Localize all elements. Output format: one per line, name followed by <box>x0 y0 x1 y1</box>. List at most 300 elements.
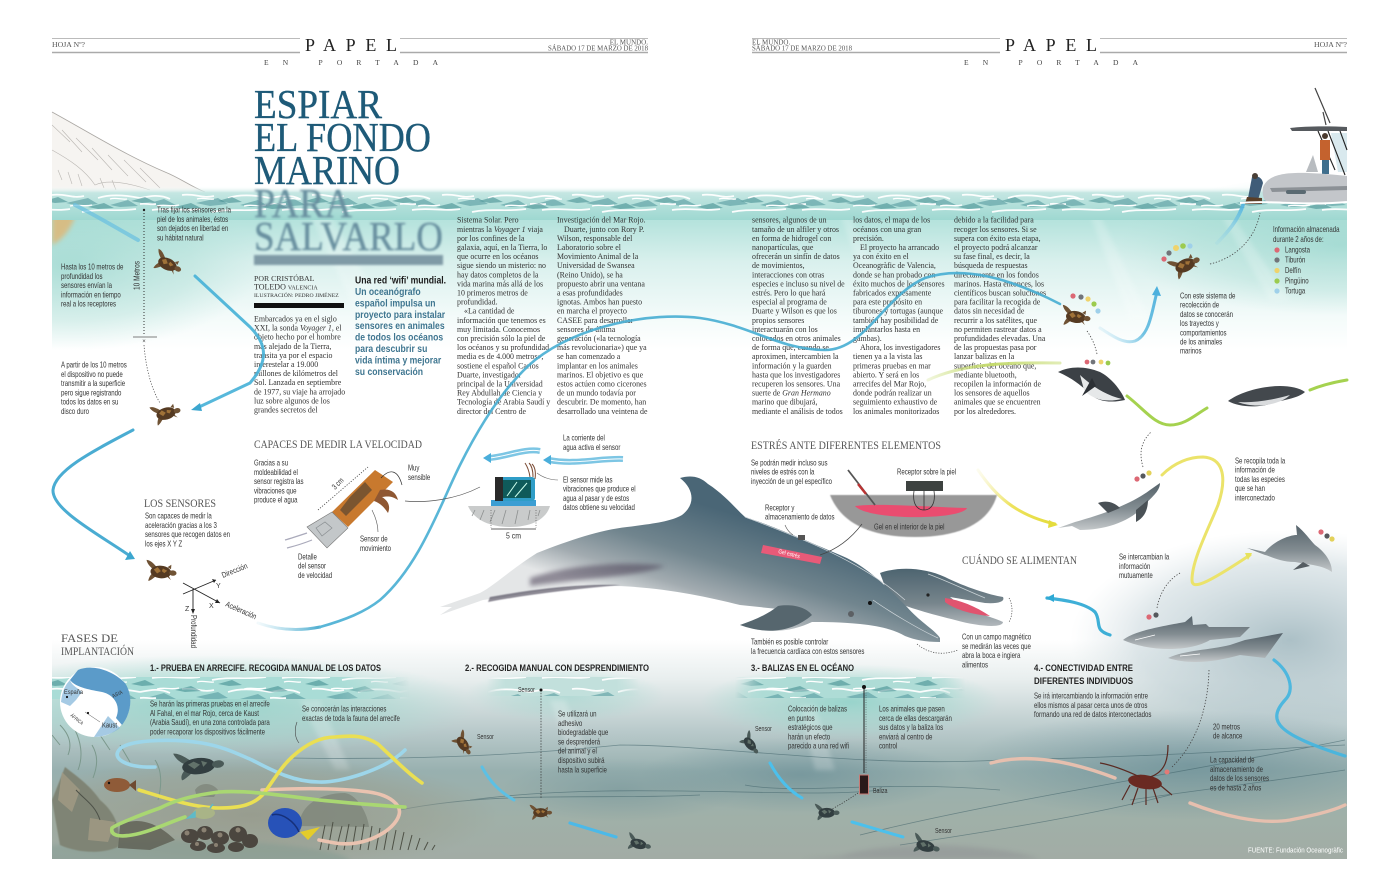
article column 2: Rey Abdullah de Ciencia y <box>457 389 542 398</box>
callout: beyond 10 metres: A partir de los 10 metros <box>61 361 127 370</box>
phase 2 diagram: Sensor <box>518 686 535 694</box>
article column 6: datos sin necesidad de <box>954 307 1025 316</box>
label: receptor almacenamiento: Receptor y <box>765 504 795 513</box>
article column 1: grandes secretos del <box>254 406 318 414</box>
article column 2: Tecnología de Arabia Saudí y <box>457 398 550 407</box>
article column 3: desarrollado una veintena de <box>557 407 648 416</box>
article column 1: millones de kilómetros del <box>254 369 339 378</box>
article column 2: por los confines de la <box>457 234 525 243</box>
phase 3 sensor labels: Sensor <box>935 827 952 835</box>
byline: POR CRISTÓBAL <box>254 273 315 283</box>
callout: up to 10 metres: sensores envían la <box>61 281 112 290</box>
axes diagram: Profundidad <box>189 615 198 648</box>
skin cross-section diagram <box>785 468 997 555</box>
waves over hull <box>1240 202 1347 203</box>
header: left page: PAPEL <box>305 35 397 55</box>
phase 2 wave band <box>487 677 639 696</box>
article column 6: animales que se encuentren <box>954 398 1041 407</box>
intro callout: su conservación <box>355 366 423 378</box>
label: detalle sensor: de velocidad <box>298 571 332 580</box>
header: left page <box>52 35 648 67</box>
trajectory: yellow route <box>978 457 1250 585</box>
callout: recoleccion: recolección de <box>1180 301 1219 310</box>
phase 1 text: first tests: Al Fahal, en el mar Rojo, cerca de Kaust <box>150 709 259 718</box>
article column 6: directamente en los fondos <box>954 270 1039 279</box>
article column 3: más revolucionaria») que ya <box>557 343 647 352</box>
section: los sensores: sensores que recogen datos en <box>145 530 230 539</box>
article column 3: de un mundo todavía por <box>557 389 636 398</box>
article column 3: implantar en los animales <box>557 361 638 370</box>
callout: corriente: La corriente del <box>563 434 605 443</box>
article column 4: hasta que los investigadores <box>752 370 840 379</box>
article column 5: Ahora, los investigadores <box>860 343 940 352</box>
phase 2 heading: 2.- RECOGIDA MANUAL CON DESPRENDIMIENTO <box>465 663 649 673</box>
article column 1: Embarcados ya en el siglo <box>254 314 337 324</box>
intro callout: para descubrir su <box>355 343 428 355</box>
trajectory: blue route <box>53 205 1345 756</box>
title: blurred submerged part: PARA <box>254 180 352 226</box>
article column 4: colocados en otros animales <box>752 334 841 343</box>
section: los sensores <box>144 498 230 549</box>
article column 3: se han comenzado a <box>557 352 621 361</box>
article column 5: gambas). <box>853 334 882 343</box>
heading: fases de implantacion <box>61 633 135 658</box>
callout: recoleccion: Con este sistema de <box>1180 292 1235 301</box>
article column 2: hay datos completos de la <box>457 270 539 279</box>
article column 2: mientras la Voyager 1 viaja <box>457 225 543 234</box>
callout: recopila: información de <box>1235 466 1275 475</box>
article column 3: Investigación del Mar Rojo. <box>557 216 646 225</box>
phase 2 text: dispositivo subirá <box>558 756 605 765</box>
skin cross-section diagram: Receptor sobre la piel <box>897 468 956 477</box>
article column 4: mediante el análisis de todos <box>752 407 843 416</box>
callout: beyond 10 metres: el dispositivo no puede <box>61 370 123 379</box>
callout: recoleccion: marinos <box>1180 347 1202 356</box>
intro callout: sensores en animales <box>355 320 445 332</box>
phase 1 wave band <box>52 677 410 699</box>
title: blurred submerged part: SALVARLO <box>254 213 443 259</box>
article column 3: Universidad de Swansea <box>557 261 635 270</box>
title: ESPIAR <box>254 81 383 127</box>
callout: sensor mide: datos obtiene su velocidad <box>563 503 635 512</box>
callout: storage: La capacidad de <box>1210 756 1255 765</box>
depth scale: 10 metres <box>132 209 160 403</box>
source credit: FUENTE: Fundación Oceanogràfic <box>1248 848 1343 854</box>
article column 5: para este propósito en <box>853 298 922 307</box>
water current arrows <box>483 450 623 465</box>
intro callout: proyecto para instalar <box>355 309 445 321</box>
callout: up to 10 metres: profundidad los <box>61 272 103 281</box>
icon: phase 3 turtle 1 <box>737 730 764 758</box>
article column 4: recuperen los sensores. Una <box>752 380 841 388</box>
phase 1 text: first tests: poder recaporar los dispositivos fácilmente <box>150 728 265 737</box>
article column 4: interacciones con otras <box>752 270 824 279</box>
article column 2: Duarte, investigador <box>457 370 522 379</box>
article column 1: objeto hecho por el hombre <box>254 333 341 342</box>
callout: moldeabilidad: Gracias a su <box>254 459 288 468</box>
label: muy sensible: sensible <box>408 473 430 482</box>
article column 1: Sol. Lanzada en septiembre <box>254 378 342 387</box>
article column 5: donde podrán realizar un <box>853 389 932 398</box>
phase 1 text: first tests: Se harán las primeras pruebas en el arrecife <box>150 700 270 709</box>
article column 5: ya con éxito en el <box>853 252 909 261</box>
article column 2: información que tenemos es <box>457 316 546 325</box>
article column 2: sigue siendo un misterio: no <box>457 261 546 270</box>
callout: recopila: todas las especies <box>1235 475 1285 484</box>
article column 5: también hay posibilidad de <box>853 316 939 325</box>
legend: species: Información almacenada <box>1273 225 1340 234</box>
section: los sensores: los ejes X Y Z <box>145 540 183 549</box>
article column 2: profundidad. <box>457 298 498 307</box>
phase 3 sensor labels <box>755 725 952 835</box>
icon: penguin 1 <box>1058 368 1125 402</box>
callout: moldeabilidad: moldeabilidad el <box>254 468 298 477</box>
icon: blue tang fish <box>268 808 320 840</box>
intro callout: español impulsa un <box>355 298 436 310</box>
article column 2: galaxia, aquí, en la Tierra, lo <box>457 243 547 252</box>
article column 1: interestelar a 19.000 <box>254 360 318 369</box>
header: left page: EL MUNDO. <box>610 38 648 46</box>
callout: range: de alcance <box>1213 732 1242 741</box>
title <box>254 81 431 193</box>
phase 3 text: beacons: Colocación de balizas <box>788 705 847 714</box>
article column 3: marinos. El objetivo es que <box>557 370 644 379</box>
article column 6: su fase final, es decir, la <box>954 252 1030 261</box>
phase 4 heading: 4.- CONECTIVIDAD ENTRE <box>1034 663 1133 673</box>
article column 5: océanos con una gran <box>853 225 921 234</box>
callout: moldeabilidad: vibraciones que <box>254 487 297 496</box>
header: right page <box>752 35 1347 67</box>
article column 4: interactuarán con los <box>752 325 818 334</box>
header: left page: SÁBADO 17 DE MARZO DE 2018 <box>548 44 648 52</box>
article column 5: fabricados expresamente <box>853 288 932 298</box>
article column 6: el proyecto podrá alcanzar <box>954 243 1038 252</box>
phase 1 text: interactions: Se conocerán las interacciones <box>302 705 387 714</box>
callout: gel especifico: Se podrán medir incluso sus <box>751 459 828 468</box>
phase 1 text: interactions: exactas de toda la fauna del arrecife <box>302 714 400 723</box>
article column 1: transita ya por el espacio <box>254 351 332 360</box>
article column 5: abierto. Y será en los <box>853 370 919 379</box>
axes diagram: Z <box>185 606 190 613</box>
phase 2 text: se desprenderá <box>558 738 600 747</box>
axes diagram <box>183 561 258 648</box>
depth scale: 10 metres: × <box>142 339 146 345</box>
article column 4: de forma que, cuando se <box>752 343 829 352</box>
article column 4: estrés. Pero lo que hará <box>752 288 826 298</box>
callout: gel especifico: inyección de un gel específico <box>751 477 832 486</box>
callout: intercambian: Se intercambian la <box>1119 553 1169 562</box>
phase 3 text: beacons: en puntos <box>788 714 815 723</box>
article column 2: «La cantidad de <box>464 307 515 316</box>
phase 4 text: formando una red de datos interconectados <box>1034 710 1152 719</box>
callout: up to 10 metres: información en tiempo <box>61 291 121 300</box>
label: sensor de movimiento: movimiento <box>360 544 391 553</box>
legend: species: Langosta <box>1285 246 1310 255</box>
icon: penguin 2 <box>1228 386 1305 406</box>
second dolphin with open mouth <box>880 569 1003 626</box>
callout: gel especifico: niveles de estrés con la <box>751 468 814 477</box>
header: right page: EL MUNDO. <box>752 38 790 46</box>
phase 3 text: animals: cerca de ellas descargarán <box>879 714 952 723</box>
article column 6: búsqueda de respuestas <box>954 261 1028 270</box>
callout: recopila: que se han <box>1235 484 1265 493</box>
legend: species: durante 2 años de: <box>1273 235 1324 244</box>
phase 4 heading: DIFERENTES INDIVIDUOS <box>1034 676 1133 686</box>
icon: turtle with sensor <box>145 560 177 583</box>
heading: estres: ESTRÉS ANTE DIFERENTES ELEMENTOS <box>751 438 941 452</box>
sea background: upper water <box>52 220 1347 344</box>
article column 4: tamaño de un alfiler y otros <box>752 225 839 234</box>
data dots: shark <box>1146 612 1159 620</box>
label: muy sensible: Muy <box>408 464 420 473</box>
article column 6: lanzar balizas en la <box>954 352 1015 361</box>
sea background: lower water <box>0 530 1400 859</box>
phase 1 heading: 1.- PRUEBA EN ARRECIFE. RECOGIDA MANUAL DE LOS DATOS <box>150 663 381 673</box>
article column 4: propios sensores <box>752 316 804 325</box>
data dots: dolphin 2 <box>1318 529 1335 542</box>
callout: beyond 10 metres: todos los datos en su <box>61 398 118 407</box>
article column 2: que ocurre en los océanos <box>457 252 539 261</box>
article column 5: tiburones y tortugas (aunque <box>853 307 944 316</box>
header: left page: HOJA Nº? <box>52 41 85 49</box>
skin cross-section diagram: Gel en el interior de la piel <box>874 523 945 532</box>
icon: phase 3 turtle 3 <box>910 833 942 858</box>
callout: campo magnetico: abra la boca e ingiera <box>962 651 1020 660</box>
section: los sensores: LOS SENSORES <box>144 498 216 510</box>
callout: campo magnetico: alimentos <box>962 661 988 670</box>
phase 4 text: ellos mismos al pasar cerca unos de otros <box>1034 701 1148 710</box>
callout: moldeabilidad: produce el agua <box>254 496 298 505</box>
byline <box>254 273 344 308</box>
callout: beyond 10 metres: pero sigue registrando <box>61 389 121 398</box>
article column 3: Movimiento Animal de la <box>557 252 639 261</box>
callout: fixing sensors: su hábitat natural <box>157 234 204 243</box>
article column 4: especial al programa de <box>752 298 827 307</box>
article column 6: supera con éxito esta etapa, <box>954 234 1041 243</box>
article column 3: generación («la tecnología <box>557 334 641 343</box>
trajectory: pink route <box>991 759 1345 821</box>
legend: species <box>1273 225 1340 296</box>
callout: recoleccion: de los animales <box>1180 338 1223 347</box>
callout: up to 10 metres: real a los receptores <box>61 300 116 309</box>
article column 3: en marcha el proyecto <box>557 307 627 316</box>
dotted connectors between animals <box>1087 213 1260 767</box>
article column 6: los sensores de aquellos <box>954 389 1030 398</box>
article column 6: recurrir a los satélites, que <box>954 316 1038 325</box>
article column 4: Duarte y Wilson es que los <box>752 307 837 316</box>
globe map: España <box>64 690 84 696</box>
article column 4: suerte de Gran Hermano <box>752 389 831 398</box>
article column 5: arrecifes del Mar Rojo, <box>853 380 926 388</box>
velocity sensor on skin: 5 cm <box>506 532 521 540</box>
phase 1 text: interactions <box>295 705 400 743</box>
article column 3: Laboratorio sobre el <box>557 243 622 252</box>
velocity sensor on skin <box>468 463 558 540</box>
sensor detail illustration <box>285 467 402 548</box>
boat illustration <box>1245 88 1347 204</box>
globe map <box>60 667 130 737</box>
intro callout <box>355 275 446 378</box>
phase 1 text: first tests: (Arabia Saudí), en una zona controlada para <box>150 718 270 727</box>
phase 2 text: adhesivo <box>558 719 582 728</box>
article column 6: superficie del océano que, <box>954 361 1036 370</box>
phase 3 text: animals: Los animales que pasen <box>879 705 945 714</box>
section heading: velocidad: CAPACES DE MEDIR LA VELOCIDAD <box>254 439 422 451</box>
legend: species: Delfín <box>1285 266 1301 275</box>
article column 3: a esas profundidades <box>557 288 623 298</box>
callout: recopila: Se recopila toda la <box>1235 457 1285 466</box>
legend: species: Pingüino <box>1285 277 1309 286</box>
callout: recoleccion: los trayectos y <box>1180 319 1219 328</box>
article column 3: propuesto abrir una ventana <box>557 279 645 288</box>
legend: species: Tortuga <box>1285 287 1305 296</box>
icon: turtle collecting data 2 <box>1060 305 1092 328</box>
article column 4: aproximen, intercambien la <box>752 352 839 361</box>
phase 2 text: biodegradable que <box>558 728 608 737</box>
article column 2: con precisión sólo la piel de <box>457 334 546 343</box>
axes diagram: Aceleración <box>224 600 258 621</box>
main dolphin illustration: Gel estrés <box>778 549 800 560</box>
article column 2: vida marina más allá de los <box>457 279 543 288</box>
icon: turtle collecting data 1 <box>1167 249 1204 281</box>
axes diagram: Y <box>216 583 221 590</box>
phase 3 wave band <box>735 677 965 698</box>
bottom trajectories: reef <box>112 736 422 844</box>
article column 6: científicos buscan soluciones <box>954 288 1046 298</box>
phase 3 text: animals: sus datos y la baliza los <box>879 723 943 732</box>
phase 3 heading: 3.- BALIZAS EN EL OCÉANO <box>751 663 854 673</box>
phase 4 text: Se irá intercambiando la información entre <box>1034 692 1148 701</box>
callout: moldeabilidad: sensor registra las <box>254 477 304 486</box>
icon: phase 2 turtle 2 <box>530 805 552 820</box>
main dolphin illustration <box>440 476 940 642</box>
data dots: turtle 2 <box>1070 293 1101 314</box>
article column 5: los datos, el mapa de los <box>853 216 930 225</box>
legend: species: Tiburón <box>1285 256 1305 265</box>
phase 2 text: Se utilizará un <box>558 710 597 719</box>
article column 3: estos actúen como cicerones <box>557 380 647 388</box>
trajectory: green route <box>928 363 1347 425</box>
intro callout: Una red ‘wifi’ mundial. <box>355 275 446 287</box>
article column 6: debido a la facilidad para <box>954 216 1034 225</box>
label: detalle sensor: del sensor <box>298 562 327 571</box>
article column 2: muy limitada. Conocemos <box>457 325 540 334</box>
article column 5: precisión. <box>853 234 884 243</box>
callout: intercambian: información <box>1119 562 1150 571</box>
depth scale: 10 metres: 10 Metros <box>132 261 142 290</box>
callout: frecuencia cardiaca: También es posible controlar <box>751 638 829 647</box>
header: right page: PAPEL <box>1005 35 1097 55</box>
globe map: ASIA <box>111 690 124 700</box>
article column 6: recopilen la información de <box>954 380 1041 388</box>
phase 2 text: del animal y el <box>558 747 597 756</box>
article column 3: ignotas. Ambos han puesto <box>557 298 642 307</box>
callout: campo magnetico: se medirán las veces que <box>962 642 1031 651</box>
callout: beyond 10 metres: disco duro <box>61 407 89 416</box>
article column 6: por los alrededores. <box>954 407 1016 416</box>
phase 2 text: hasta la superficie <box>558 766 607 775</box>
section: los sensores: aceleración gracias a los 3 <box>145 521 217 530</box>
article column 5: seguimiento exhaustivo de <box>853 398 938 407</box>
article column 3: Duarte, junto con Rory P. <box>564 225 644 234</box>
intro callout: de todos los océanos <box>355 332 443 344</box>
callout: fixing sensors: son dejados en libertad en <box>157 224 228 233</box>
callout: sensor mide: agua al pasar y de estos <box>563 494 630 503</box>
phase 4 heading <box>1034 663 1133 686</box>
article column 2: Sistema Solar. Pero <box>457 216 519 225</box>
icon: turtle at depth <box>149 400 183 426</box>
callout: sensor mide: vibraciones que produce el <box>563 485 636 494</box>
phase 3 text: beacons: parecido a una red wifi <box>788 742 849 751</box>
article column 5: primeras pruebas en mar <box>853 361 931 370</box>
article column 5: Oceanogràfic de Valencia, <box>853 261 936 270</box>
article column 3: CASEE para desarrollar <box>557 316 634 325</box>
globe map: Kaust <box>102 722 117 730</box>
icon: turtle near surface <box>150 249 185 279</box>
article column 6: profundidades elevadas. Una <box>954 334 1046 343</box>
icon: sharks <box>1123 616 1283 662</box>
article column 4: marino que dibujará, <box>752 398 818 407</box>
callout: campo magnetico: Con un campo magnético <box>962 633 1031 642</box>
label: sensor de movimiento: Sensor de <box>360 535 388 544</box>
title: EL FONDO <box>254 114 431 160</box>
article column 6: para facilitar la recogida de <box>954 298 1041 307</box>
label: receptor almacenamiento: almacenamiento de datos <box>765 513 835 522</box>
header: right page: HOJA Nº? <box>1314 41 1347 49</box>
article column 3: descubrir. De momento, han <box>557 398 646 407</box>
icon: dolphin 2 <box>1247 525 1332 572</box>
article column 2: media es de 4.000 metros», <box>457 352 543 361</box>
article column 4: ofrecerán un sinfín de datos <box>752 252 840 261</box>
phase 3 text: animals: control <box>879 742 898 751</box>
globe map: ÁFRICA <box>69 712 85 727</box>
article column 3: Wilson, responsable del <box>557 234 633 243</box>
article column 1: más alejado de la Tierra, <box>254 342 331 351</box>
article column 1: XXI, la sonda Voyager 1, el <box>254 324 341 333</box>
article column 5: donde se han probado con <box>853 270 935 279</box>
waves: top band <box>52 186 1347 220</box>
phase 3 text: beacons: harán un efecto <box>788 733 830 742</box>
callout: sensor mide: El sensor mide las <box>563 476 613 485</box>
callout: fixing sensors: piel de los animales, éstos <box>157 215 229 224</box>
leader line to velocity sensor <box>405 487 480 502</box>
article column 2: principal de la Universidad <box>457 380 543 388</box>
icon: fish orange <box>104 778 136 792</box>
icon: lobster <box>1100 745 1172 805</box>
header: right page: SÁBADO 17 DE MARZO DE 2018 <box>752 44 852 52</box>
data dots: dolphin 1 <box>1134 470 1152 482</box>
byline: TOLEDO VALENCIA <box>254 282 318 292</box>
heading: fases de implantacion: FASES DE <box>61 633 118 645</box>
article column 1: de 1977, su viaje ha arrojado <box>254 387 345 396</box>
header: right page: EN PORTADA <box>964 58 1139 67</box>
phase 3 sensor labels: Sensor <box>755 725 772 733</box>
article column 2: director del Centro de <box>457 407 527 416</box>
article column 5: El proyecto ha arrancado <box>860 243 939 252</box>
article column 6: recoger los sensores. Si se <box>954 225 1037 234</box>
trajectory arrows <box>125 286 1252 602</box>
data dots: turtle 1 <box>1161 243 1193 262</box>
article column 2: los océanos y su profundidad <box>457 343 549 352</box>
callout: storage: datos de los sensores <box>1210 774 1269 783</box>
icon: sea turtle reef <box>173 749 225 781</box>
section: los sensores: Son capaces de medir la <box>145 512 212 521</box>
callout: corriente: agua activa el sensor <box>563 443 621 452</box>
reef: rocks and coral <box>52 724 466 859</box>
article column 1: luz sobre algunos de los <box>254 396 330 405</box>
intro callout: Un oceanógrafo <box>355 286 421 298</box>
callout: up to 10 metres: Hasta los 10 metros de <box>61 263 123 272</box>
